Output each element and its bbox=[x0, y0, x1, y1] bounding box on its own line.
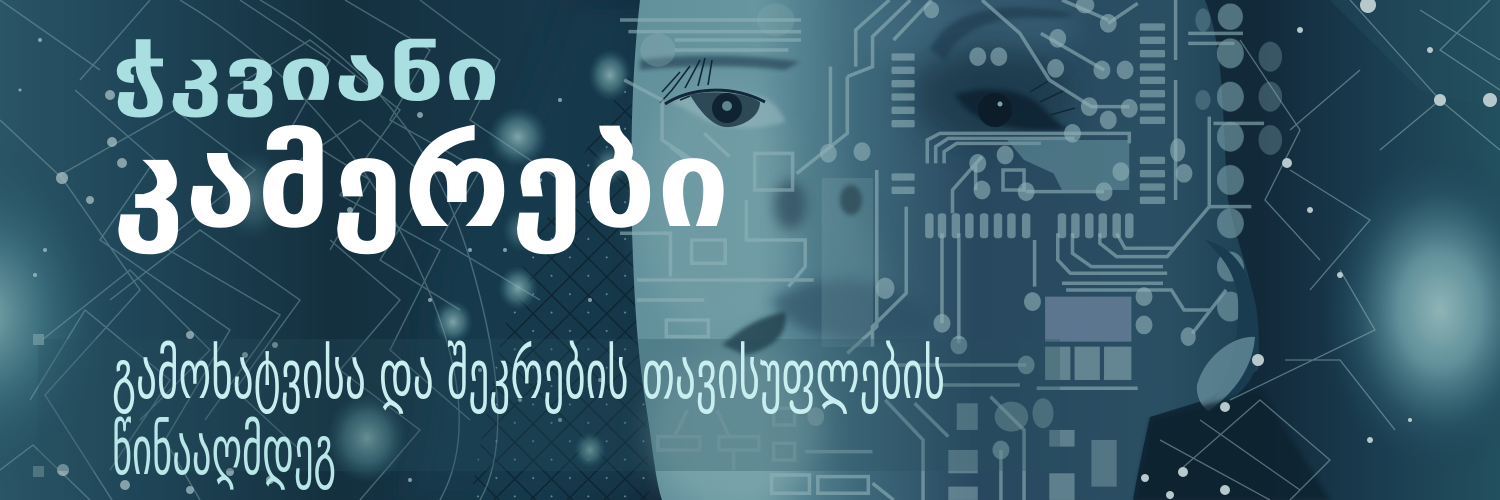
eyebrow left bbox=[640, 56, 800, 70]
hair dots bbox=[1195, 3, 1282, 322]
pad column left bbox=[891, 53, 915, 194]
eye left bbox=[660, 58, 785, 128]
network nodes left bbox=[18, 38, 602, 494]
glowing orbs bbox=[217, 49, 632, 482]
ear bbox=[1197, 240, 1259, 412]
title line 1: ჭკვიანი bbox=[112, 32, 500, 118]
chip pin row bbox=[925, 213, 1133, 238]
network graphic right bbox=[1135, 0, 1500, 500]
chip and filled components bbox=[822, 140, 1131, 500]
lips bbox=[772, 280, 930, 341]
text band bbox=[33, 334, 1060, 477]
title line 2: კამერები bbox=[112, 113, 730, 255]
face bbox=[631, 0, 1259, 500]
nose side shadow bbox=[774, 180, 806, 230]
nostril bbox=[840, 185, 862, 215]
lip shadow bbox=[722, 312, 786, 355]
eyebrow right bbox=[930, 7, 1072, 60]
traces bbox=[620, 0, 1264, 500]
chin highlight bbox=[650, 350, 820, 500]
forehead right tone bbox=[840, 0, 1080, 65]
cheek highlight bbox=[640, 80, 800, 340]
eye right bbox=[955, 80, 1075, 130]
round pads bbox=[640, 0, 1196, 459]
pad column right bbox=[1140, 23, 1165, 204]
circuit board over the face bbox=[620, 0, 1282, 500]
nose highlight bbox=[790, 130, 890, 290]
mandala mesh behind the face bbox=[400, 0, 660, 500]
subtitle line 2: წინააღმდეგ bbox=[112, 412, 336, 491]
network lines left bbox=[0, 0, 560, 500]
dark eye socket bbox=[910, 45, 1070, 145]
subtitle line 1: გამოხატვისა და შეკრების თავისუფლების bbox=[112, 336, 945, 415]
